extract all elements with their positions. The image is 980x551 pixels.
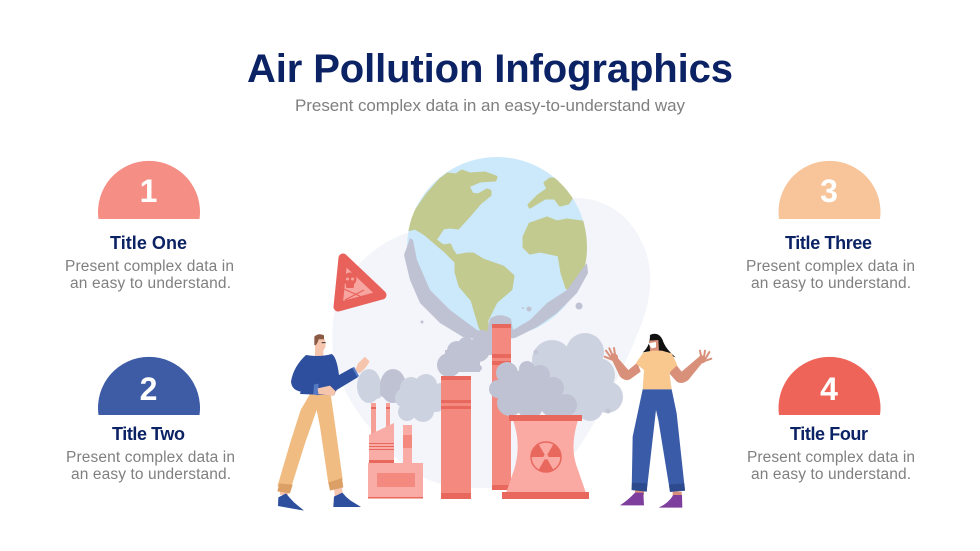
globe — [400, 157, 590, 340]
panel: title one: 1 — [140, 173, 157, 209]
smoke above factory — [357, 369, 449, 422]
panel: title two: 2 — [140, 371, 157, 407]
man — [277, 334, 370, 511]
panel: title three — [746, 161, 915, 292]
continent: europe — [529, 179, 580, 207]
panel: title four: an easy to understand. — [751, 466, 911, 483]
dots around smoke ring — [420, 302, 582, 324]
panel: title two: Title Two — [112, 424, 185, 444]
smoke ring — [404, 238, 588, 341]
panel: title one: Title One — [110, 233, 187, 253]
woman — [605, 334, 711, 508]
illustration: air pollution scene — [277, 157, 711, 511]
continent: americas — [400, 171, 513, 340]
panel: title two: an easy to understand. — [71, 466, 231, 483]
panel: title two — [66, 357, 235, 483]
panel: title four: Present complex data in — [747, 449, 915, 466]
panel: title three: 3 — [820, 173, 838, 209]
subtitle: Present complex data in an easy-to-understand way — [295, 96, 686, 115]
panel: title two: Present complex data in — [66, 449, 235, 466]
panel: title four: Title Four — [790, 424, 868, 444]
panel: title three: an easy to understand. — [751, 275, 911, 292]
panel: title one: Present complex data in — [65, 258, 234, 275]
title: Air Pollution Infographics — [247, 47, 733, 91]
background blob — [332, 198, 650, 488]
panel: title four: 4 — [820, 371, 838, 407]
panel: title three: Present complex data in — [746, 258, 915, 275]
cooling tower — [502, 415, 589, 499]
skull — [344, 272, 356, 288]
radiation symbol — [529, 442, 563, 472]
smoke above central chimney — [437, 330, 500, 377]
tall chimney — [492, 324, 511, 490]
big smoke — [489, 333, 623, 421]
panel: title one — [65, 161, 234, 292]
continent: africa — [524, 218, 590, 288]
panel: title four — [747, 357, 915, 483]
central chimney — [441, 376, 471, 499]
panel: title one: an easy to understand. — [70, 275, 231, 292]
warning sign — [338, 258, 382, 307]
factory — [368, 403, 423, 498]
panel: title three: Title Three — [785, 233, 872, 253]
